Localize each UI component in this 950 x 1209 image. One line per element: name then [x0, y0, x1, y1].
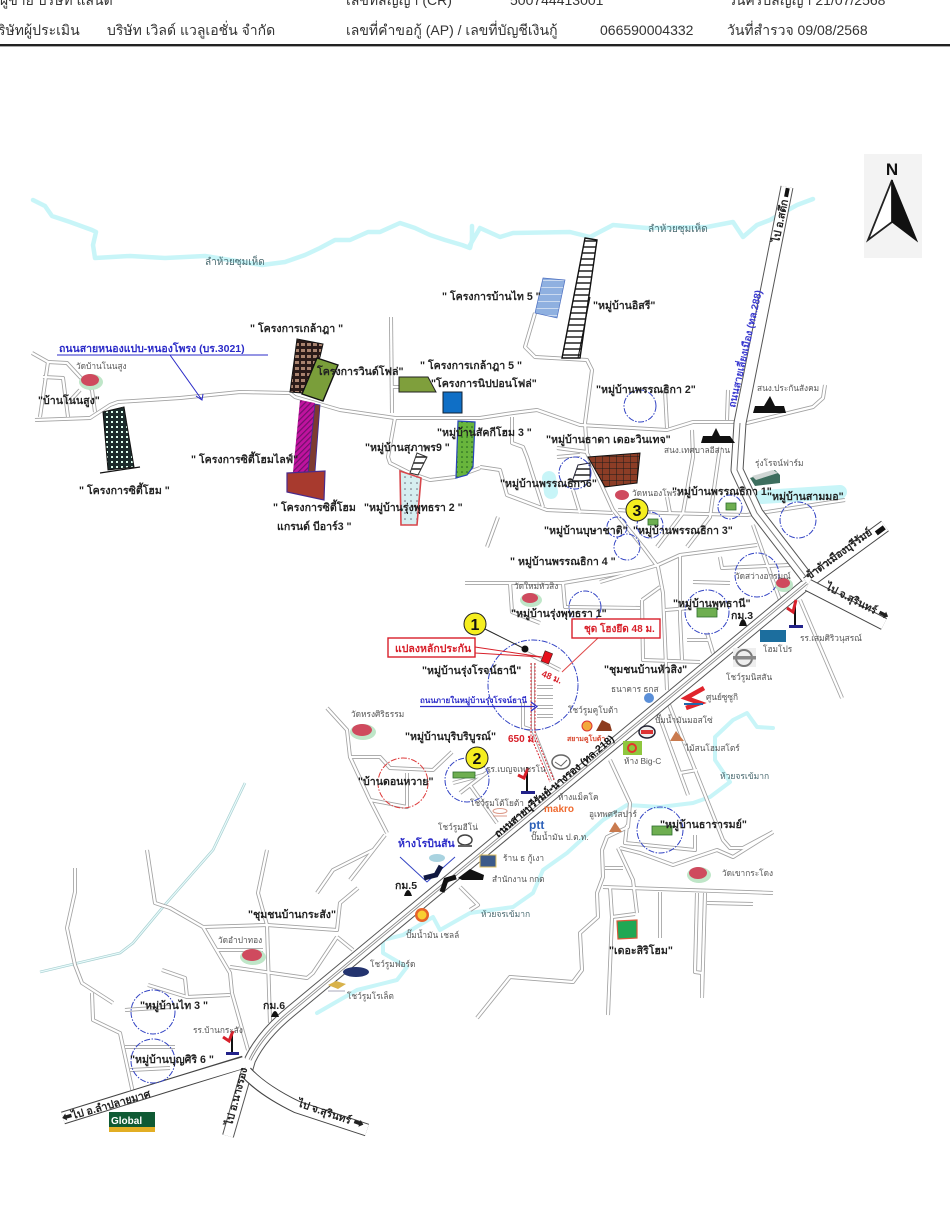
callout: collateral plot: แปลงหลักประกัน [395, 643, 472, 655]
logo: spa icon [609, 822, 622, 832]
label group north-east: "หมู่บ้านบุษาชาติ" [544, 524, 628, 538]
plot: Thada The Vintage [588, 453, 640, 487]
label group north-west: " โครงการเกล้าฎา " [250, 322, 343, 335]
logo: Toyota [493, 808, 507, 816]
km labels: กม.5 [395, 880, 417, 892]
label group centre: "ชุมชนบ้านหัวสิง" [604, 663, 687, 677]
logo: Shell [415, 908, 429, 922]
logo: kubota dealer text: สยามคูโบต้า [567, 734, 605, 744]
label group south [130, 818, 747, 1067]
km labels [263, 610, 753, 1012]
km labels: กม.6 [263, 1000, 285, 1012]
plot: Klaofa [290, 339, 323, 393]
logo: Esso [639, 726, 655, 738]
label group south: "หมู่บ้านธารารมย์" [660, 818, 747, 832]
logo: resort icon [670, 731, 684, 741]
landmark small labels: รุ่งโรจน์ฟาร์ม [755, 458, 803, 469]
landmark small labels: รร.เบญจเพชรโน [486, 764, 546, 774]
landmark small labels: วัดสว่างอารมณ์ [735, 571, 791, 581]
label group north-west: " โครงการซิตี้โฮม [273, 499, 356, 514]
label group centre: "หมู่บ้านรุ่งพุทธรา 1" [511, 607, 607, 621]
marker 1: 1 [471, 617, 480, 634]
logo: Hino [458, 835, 472, 847]
black leader line [483, 628, 525, 649]
label group north-centre [364, 290, 696, 515]
road label: bypass 288: ถนนสายเลี่ยงเมือง (ทล.288) [724, 288, 765, 409]
label group centre [358, 597, 751, 788]
landmark small labels: รร.เสมศิริวนุสรณ์ [800, 633, 862, 644]
water labels: ห้วยจรเข้มาก [481, 909, 530, 919]
header appraiser row [0, 21, 868, 39]
lake near village [762, 492, 840, 497]
callout: collateral plot [388, 638, 475, 657]
plots [100, 238, 640, 939]
header appraiser row: ริษัทผู้ประเมิน [0, 22, 80, 39]
icon: school south-west [223, 1031, 239, 1055]
landmark small labels: โชว์รูมโรเล็ต [347, 991, 394, 1002]
road label: to Surin east: ไป จ.สุรินทร์ ➡ [822, 580, 892, 624]
km labels: กม.3 [731, 610, 753, 622]
red dashed access road [531, 663, 554, 782]
marker 2: 2 [473, 751, 482, 768]
landmark small labels: ห้าง Big-C [624, 756, 661, 766]
label group centre: "หมู่บ้านพุทธานี" [673, 597, 751, 611]
landmark small labels: ปั๊มน้ำมัน ป.ต.ท. [531, 830, 589, 842]
label group north-centre: "หมู่บ้านสัคกีโฮม 3 " [437, 426, 532, 440]
road label: to Nang Rong: ไป อ.นางรอง [222, 1066, 250, 1128]
logo: makro: makro [544, 804, 574, 815]
label group north-east: "หมู่บ้านสามมอ" [767, 490, 844, 504]
plot: City Home Grand [287, 471, 325, 500]
logo: Ford [343, 967, 369, 977]
landmark small labels: ศูนย์ซูซูกิ [706, 692, 738, 703]
collateral plot [541, 651, 553, 664]
label group south: "ชุมชนบ้านกระสัง" [248, 908, 336, 922]
landmark small labels: สนง.เทศบาลอีสาน [664, 445, 730, 455]
logo: Mazda [552, 755, 570, 769]
plot: City Home Life [293, 400, 320, 473]
landmark small labels: โชว์รูมฮีโน่ [438, 822, 478, 833]
label group north-west: โครงการวินด์โฟล่" [316, 365, 403, 378]
label group north-east: "หมู่บ้านพรรณธิกา 1" [672, 485, 772, 499]
road label: to Lam Plai Mat: ⬅ไป อ.ลำปลายมาศ [60, 1087, 152, 1125]
road label: to Satuek: ไป อ.สตึก [769, 198, 791, 245]
plot: City Home [100, 407, 140, 473]
road label: Buriram-Nangrong 218: ถนนสายบุรีรัมย์-นางรอง (ทล.218) [492, 732, 618, 841]
label group centre: "บ้านดอนหวาย" [358, 775, 434, 788]
Robinson site and black structures [400, 854, 496, 892]
landmark small labels: ไม้สนโฮมสโตร์ [684, 743, 740, 753]
header cropped top row [0, 0, 886, 9]
red leader lines to plot [475, 647, 542, 657]
label group north-west: แกรนด์ บีอาร์3 " [277, 520, 352, 533]
logo: Nissan [733, 648, 756, 667]
label group north-centre: " โครงการเกล้าฎา 5 " [420, 359, 522, 372]
plot: Ban Thai 5 [535, 278, 565, 318]
shop icon [480, 855, 496, 867]
site annotations [388, 499, 660, 782]
label group north-west: "บ้านโนนสูง" [38, 394, 100, 408]
landmark small labels: โชว์รูมโต้โยต้า [470, 798, 524, 809]
logo: Big C [623, 741, 642, 755]
label group north-west [38, 322, 403, 533]
label group north-east: " หมู่บ้านพรรณธิกา 4 " [510, 555, 616, 569]
road label: to Surin south: ไป จ.สุรินทร์ ➡ [295, 1096, 366, 1132]
landmark small labels: วัดบ้านโนนสูง [76, 361, 127, 372]
landmark small labels: วัดอำปาทอง [218, 935, 262, 945]
landmark small labels: วัดหนองโพรง [632, 488, 681, 498]
label group north-centre: "หมู่บ้านพรรณธิกา 2" [596, 383, 696, 397]
label group north-centre: "หมู่บ้านรุ่งพุทธรา 2 " [364, 501, 463, 515]
label group north-centre: "หมู่บ้านอิสรี" [593, 299, 655, 313]
water labels: ลำห้วยซุมเห็ด [205, 254, 265, 268]
header appraiser row: วันที่สำรวจ 09/08/2568 [727, 21, 868, 38]
header appraiser row: เลขที่คำขอกู้ (AP) / เลขที่บัญชีเงินกู้ [346, 21, 558, 39]
landmark small labels: ปั๊มน้ำมันมอสโซ่ [655, 713, 713, 725]
marker 1 [464, 613, 486, 635]
red leader: deed point [562, 638, 598, 672]
plot: Suphaphon 9 [410, 453, 427, 475]
label group north-centre: "หมู่บ้านพรรณธิกา6" [500, 477, 597, 491]
callout: deed point 48 m [572, 619, 660, 638]
road arms at northern junction [807, 526, 885, 624]
canal: thin diagonal [40, 783, 245, 972]
callout: deed point 48 m: ชุด โฮงยึด 48 ม. [584, 622, 655, 635]
point marker [522, 646, 528, 652]
government building icons [701, 396, 786, 443]
distance label 650 m: 650 ม. [508, 734, 537, 745]
landmark small labels: วัดใหม่หัวสิง [514, 581, 558, 591]
landmark small labels: ธนาคาร ธกส [611, 684, 659, 694]
landmark small labels: โชว์รูมฟอร์ด [370, 959, 415, 970]
brand logos [109, 630, 786, 1132]
label group north-east [510, 485, 844, 569]
river: top stream [33, 199, 813, 265]
north arrow [864, 154, 922, 258]
label group north-centre: "โครงการนิปปอนโฟล่" [431, 377, 537, 390]
logo: Global House: Global [111, 1116, 142, 1127]
icon: school centre [518, 767, 535, 794]
logo: Suzuki [684, 688, 704, 708]
label group south: "หมู่บ้านบุญศิริ 6 " [130, 1053, 214, 1067]
logo: ptt: ptt [529, 818, 544, 832]
landmark small labels: โชว์รูมคูโบต้า [568, 705, 618, 716]
label group north-west: " โครงการซิตี้โฮม " [79, 482, 170, 497]
Robinson plot outline [400, 857, 455, 882]
header appraiser row: บริษัท เวิลด์ แวลูเอชั่น จำกัด [107, 21, 275, 39]
landmark small labels: โชว์รูมนิสสัน [726, 672, 772, 683]
road label: Nong Paep - Nong Phrong [57, 342, 268, 400]
label group north-centre: "หมู่บ้านธาดา เดอะวินเทจ" [546, 433, 671, 447]
landmark small labels: ร้าน ธ กู้เงา [503, 853, 544, 864]
label group north-centre: " โครงการบ้านไท 5 " [442, 290, 541, 303]
water labels [205, 221, 769, 919]
label: Robinson: ห้างโรบินสัน [398, 837, 455, 850]
internal road label and arrow: ถนนภายในหมู่บ้านรุ่งโรจน์ธานี [420, 695, 528, 706]
mini village icons [453, 503, 736, 835]
landmark small labels: ห้างแม็คโค [558, 792, 599, 802]
label group south: "เดอะสิริโฮม" [609, 944, 673, 957]
road end arrow: north [784, 188, 790, 197]
plot: Isari [562, 238, 597, 358]
water labels: ห้วยจรเข้มาก [720, 771, 769, 781]
school icons [223, 600, 803, 1055]
label group south: "หมู่บ้านไท 3 " [140, 999, 208, 1013]
icon: school east [787, 600, 803, 628]
marker 3 [626, 499, 648, 521]
Robinson icon [424, 866, 441, 878]
landmark small labels: อูเทพศรีสปาร์ [589, 809, 637, 820]
river: eastern stream [317, 713, 773, 1013]
north arrow: N [886, 160, 898, 179]
water labels: ลำห้วยซุมเห็ด [648, 221, 708, 235]
landmark small labels: สนง.ประกันสังคม [757, 383, 819, 393]
project and village labels [38, 290, 844, 1067]
plot: Rung Phuthara 2 [400, 471, 421, 525]
icon: farm building [750, 470, 780, 486]
election office icon [458, 869, 484, 880]
landmark small labels: โฮมโปร [763, 644, 793, 654]
road end arrow: north-east [875, 525, 886, 535]
pond [549, 478, 551, 492]
logo: Kubota dealer [582, 720, 612, 731]
road label: to Buriram city: ข้าตัวเมืองบุรีรัมย์ [803, 526, 875, 583]
marker 3: 3 [633, 503, 642, 520]
label group north-west: " โครงการซิตี้โฮมไลฟ์" [191, 451, 298, 466]
label group centre: "หมู่บ้านบุริบริบูรณ์" [405, 730, 496, 744]
label group north-centre: "หมู่บ้านสุภาพร9 " [365, 441, 450, 455]
local road network [32, 313, 845, 1093]
km markers [271, 619, 747, 1017]
road: north bypass 288 [737, 187, 807, 578]
road label: Nong Paep - Nong Phrong: ถนนสายหนองแปบ-หนองโพรง (บร.3021) [59, 342, 245, 355]
header appraiser row: 066590004332 [600, 22, 694, 38]
logo: Chevrolet [328, 981, 346, 991]
road arms at southern junction [63, 1062, 367, 1130]
plot: small estate [572, 463, 590, 482]
plot: Klaofa 5 [399, 377, 436, 392]
landmark small labels [76, 361, 862, 1035]
red circle: Ban Don Wai [378, 758, 428, 808]
header: appraisal details [0, 0, 950, 47]
fountain icon [429, 854, 445, 862]
landmark small labels: ปั๊มน้ำมัน เชลล์ [406, 928, 459, 940]
marker 2 [466, 747, 488, 769]
plot: Nippon Flow [443, 392, 462, 413]
village circles [131, 390, 816, 1083]
landmark small labels: วัดเขากระโดง [722, 868, 773, 878]
label group centre: "หมู่บ้านรุ่งโรจน์ธานี" [422, 664, 521, 678]
distance label 48 m: 48 ม. [540, 669, 563, 686]
black interchange [442, 877, 456, 892]
plot: The Siri Home [617, 920, 637, 939]
label group north-east: "หมู่บ้านพรรณธิกา 3" [633, 524, 733, 538]
rivers and water [33, 199, 840, 1013]
logo: bank [644, 693, 654, 703]
map [32, 154, 922, 1136]
plot: Sakki Home 3 [456, 421, 475, 478]
landmark small labels: สำนักงาน กกต [492, 874, 545, 884]
internal road label and arrow [420, 695, 537, 711]
logo: HomePro [760, 630, 786, 642]
landmark small labels: วัดหรงศิริธรรม [351, 709, 404, 719]
landmark small labels: รร.บ้านกระสัง [193, 1025, 243, 1035]
main highway: Buriram-Nangrong [228, 581, 810, 1136]
temple icons [79, 374, 793, 965]
logo: Global House [109, 1112, 155, 1132]
plot: Wind Flow [302, 358, 338, 401]
